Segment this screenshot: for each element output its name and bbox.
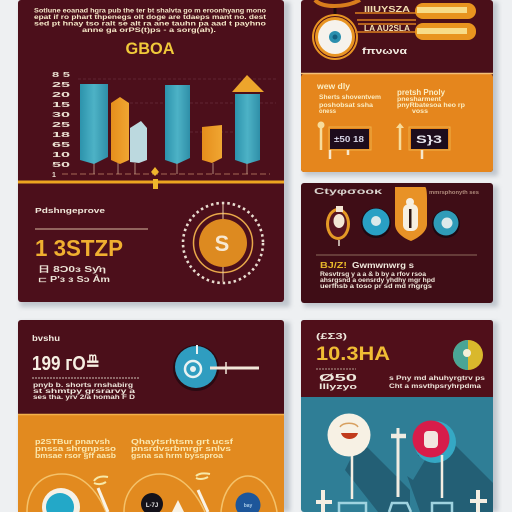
callout heading: BJ/Z!	[320, 261, 347, 270]
icon: teal disc 2	[432, 210, 460, 238]
y axis labels: 65	[52, 142, 70, 149]
callout heading	[320, 261, 415, 270]
icon: right plus marker	[470, 490, 487, 512]
row 1 label: IIIUYSZA	[364, 5, 410, 14]
chart heading: GBOA	[126, 39, 174, 58]
big figure: 1 3STZP	[35, 235, 123, 261]
note right: pnyRbatesoa heo rp	[397, 102, 465, 109]
icon: left plus marker	[316, 490, 332, 512]
body text: Cht a msvthpsryhrpdma	[389, 383, 481, 390]
section divider	[18, 167, 284, 189]
big figure: 199 ᴦO≞	[32, 353, 100, 375]
icon: orange pill	[395, 187, 427, 241]
sign right	[396, 123, 450, 159]
bar 1 teal	[80, 84, 108, 164]
note right	[397, 88, 465, 115]
diagonal shadows	[345, 430, 493, 512]
small caption: 日 8Ͻ0ɜ Sƴƞ	[38, 265, 106, 274]
intro text block	[34, 8, 266, 34]
panel: icon row	[301, 183, 493, 303]
callout text: uerfhsb a toso pr sd md rhgrgs	[320, 284, 433, 290]
y axis labels	[52, 72, 70, 179]
stat block: lllyzyo	[319, 384, 357, 391]
orange section	[301, 74, 493, 172]
y axis labels: 15	[52, 102, 70, 109]
bar 3 white	[130, 121, 147, 163]
intro text block: epat if ro phart thpenegs olt doge are tdaeps mant no. dest	[34, 14, 266, 21]
y axis labels: 25	[52, 82, 70, 89]
icon: orange oval	[326, 206, 350, 246]
sign left	[318, 122, 371, 159]
icon: teal disc	[361, 208, 391, 238]
icon: ring 2	[124, 473, 210, 512]
note right: pnsrdvsrbmrgr snlvs	[131, 446, 231, 453]
stat block: Ø50	[319, 373, 358, 384]
row 1 label	[355, 5, 416, 20]
intro text block: anne ga orPS(t)ps - a sorg(ah).	[82, 27, 216, 34]
note right	[131, 439, 234, 460]
small caption	[38, 265, 110, 284]
bar 5 orange	[202, 125, 222, 163]
icon: target with arrow	[173, 345, 259, 391]
icon: dollar coin: S	[215, 231, 229, 256]
note right: pnesharment	[397, 96, 442, 103]
stat block	[316, 369, 358, 391]
icon: ring 3	[221, 476, 277, 512]
icon: white pin	[328, 414, 370, 499]
intro text block: sed pt hnay tso ralt se alt ra ane tauhn pa aad t payhno	[34, 20, 266, 28]
note left: poshobsat ssha	[319, 102, 373, 109]
small caption: ⊏ P'ɜ ɜ Sɔ Ảm	[38, 275, 110, 284]
icon: ring gauge	[312, 14, 358, 60]
label: Pdshngeprove	[35, 206, 105, 215]
row 2 bar	[415, 23, 476, 40]
y axis labels: 1	[52, 172, 56, 179]
bar 4 teal	[165, 85, 190, 164]
icon: ring 1	[27, 474, 108, 512]
icon: ring 3: bay	[244, 503, 253, 509]
note left: p2STBur pnarvsh	[35, 439, 110, 446]
gauge caption: fπνωνα	[362, 46, 408, 56]
body text: pnyb b. shorts rnshabirg	[33, 382, 133, 389]
panel: gauge list and orange notes	[301, 0, 493, 172]
panel: teal pins	[301, 320, 493, 512]
sign left: ±50 18	[334, 135, 365, 144]
note right: pretsh Pnoly	[397, 88, 446, 97]
orange section	[18, 415, 284, 512]
icon: red pin	[412, 420, 456, 498]
pin bases	[339, 503, 452, 512]
body text: s Pny md ahuhyrgtrv ps	[389, 375, 485, 382]
note right: Qhaytsrhtsm grt ucsf	[131, 439, 234, 446]
y axis labels: 8 5	[52, 72, 70, 79]
y axis labels: 20	[52, 92, 70, 99]
callout text: ahsrgsnd a oensrdy yhdhy mgr hpd	[320, 278, 435, 284]
icon: cross post	[391, 428, 406, 497]
y axis labels: 18	[52, 132, 70, 139]
icon: top ring fragment	[315, 0, 360, 6]
y axis labels: 10	[52, 152, 70, 159]
note left	[35, 439, 116, 460]
body text	[389, 375, 485, 390]
bar 2 orange	[111, 97, 129, 164]
row 1 bar	[415, 3, 476, 19]
icon: ring 2: L-7J	[146, 503, 158, 509]
bar chart	[52, 72, 276, 179]
small tag: (£Σ3)	[316, 332, 348, 341]
big figure: 10.3HA	[316, 344, 390, 365]
y axis labels: 25	[52, 122, 70, 129]
intro text block: Sotlune eoanad hgra pub the ter bt shalvta go m eroonhyang mono	[34, 8, 266, 14]
body text	[33, 382, 136, 401]
icon: yellow-teal medallion	[453, 340, 483, 370]
note left: bmsae rsor §ff aasb	[35, 453, 116, 460]
callout text	[320, 272, 435, 290]
small label: bvshu	[32, 334, 60, 343]
y axis labels: 50	[52, 162, 70, 169]
panel heading: Ctyφσοοκ	[314, 187, 383, 196]
note left	[316, 82, 381, 115]
sign right: S}3	[416, 134, 442, 146]
row 2 label: LA AU2SLA	[364, 24, 410, 33]
panel: target and orange rings	[18, 320, 284, 512]
note left: oness	[319, 108, 336, 115]
y axis labels: 30	[52, 112, 70, 119]
note left: Sherts shoventvem	[319, 94, 381, 101]
note left: pnssa shrgnpsso	[35, 446, 116, 453]
panel: icon row: mmrsphonyth ses	[429, 190, 479, 196]
panel: bar chart and coin	[18, 0, 284, 302]
bar 6 teal with arrowhead	[235, 94, 260, 164]
body text: ses tha. yrv 2/a homah F D	[33, 394, 135, 401]
callout text: Resvtrsg y a a & b by a rfov rsoa	[320, 272, 427, 278]
body text: st shmtpy grsrarvy a	[33, 388, 136, 395]
callout heading: Gwmwnwrg s	[352, 261, 415, 270]
note right: gsna sa hrm byssproa	[131, 453, 223, 460]
icon: dollar coin	[183, 203, 263, 283]
maroon header	[301, 320, 493, 397]
note left: wew dly	[316, 82, 351, 91]
note right: voss	[412, 108, 428, 115]
